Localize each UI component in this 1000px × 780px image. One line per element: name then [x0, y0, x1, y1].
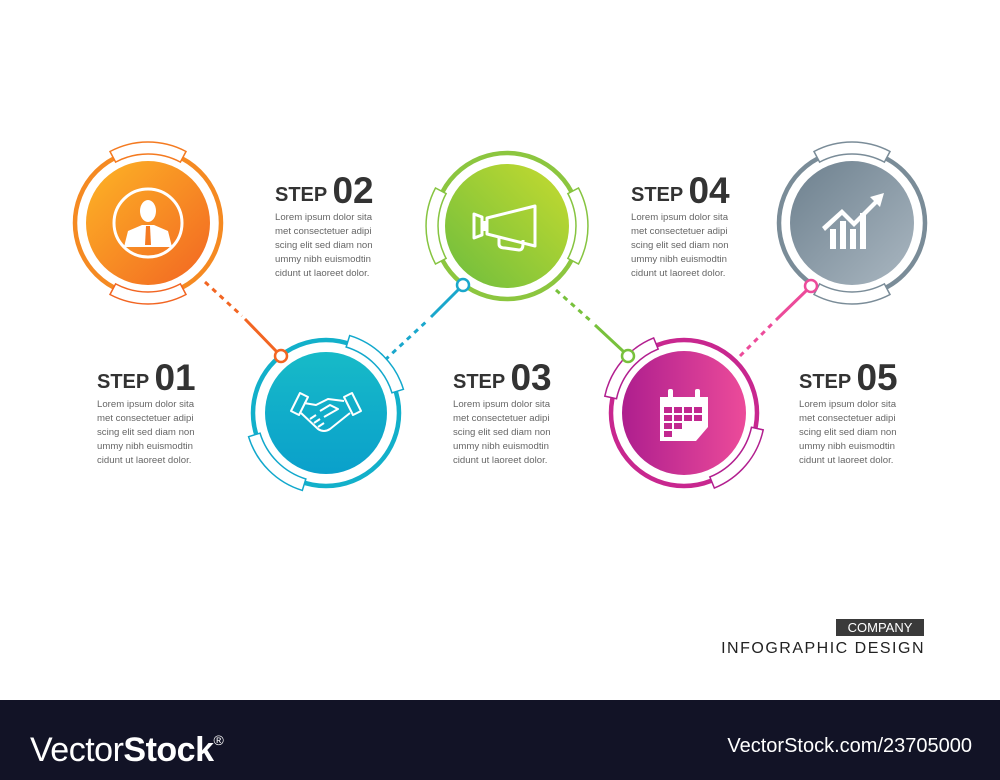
connector 4-5	[740, 290, 807, 356]
step 04 text: ummy nibh euismodtin	[631, 254, 727, 265]
step 05 text: ummy nibh euismodtin	[799, 441, 895, 452]
node markers	[275, 279, 817, 362]
step 03 text: ummy nibh euismodtin	[453, 441, 549, 452]
step 05 text: scing elit sed diam non	[799, 427, 897, 438]
step 02 text: met consectetuer adipi	[275, 226, 372, 237]
step 01 text: scing elit sed diam non	[97, 427, 195, 438]
icon: calendar	[660, 389, 708, 441]
step 02 text	[275, 170, 374, 279]
step 03 text: STEP 03	[453, 357, 552, 398]
step 03 text: met consectetuer adipi	[453, 413, 550, 424]
step 02 text: Lorem ipsum dolor sita	[275, 212, 372, 223]
infographic design title: INFOGRAPHIC DESIGN	[721, 640, 925, 657]
step 05 text: met consectetuer adipi	[799, 413, 896, 424]
step 01 text: STEP 01	[97, 357, 196, 398]
icon: growth chart	[822, 193, 884, 249]
circle 4: magenta	[598, 332, 770, 494]
circle 1: orange	[75, 142, 221, 304]
step 02 text: scing elit sed diam non	[275, 240, 373, 251]
footer logo: VectorStock®	[30, 731, 223, 769]
company label: COMPANY	[848, 620, 912, 635]
step 02 text: cidunt ut laoreet dolor.	[275, 268, 369, 279]
step 03 text: scing elit sed diam non	[453, 427, 551, 438]
step 05 text: STEP 05	[799, 357, 898, 398]
step 04 text	[631, 170, 730, 279]
step 01 text	[97, 357, 196, 466]
icon: handshake	[291, 393, 361, 431]
step 03 text: Lorem ipsum dolor sita	[453, 399, 550, 410]
connector 2-3	[385, 289, 459, 360]
step 01 text: Lorem ipsum dolor sita	[97, 399, 194, 410]
connector 3-4	[556, 290, 624, 352]
step 04 text: scing elit sed diam non	[631, 240, 729, 251]
circle 3: green	[426, 153, 588, 299]
step 04 text: met consectetuer adipi	[631, 226, 728, 237]
step 03 text	[453, 357, 552, 466]
step 01 text: cidunt ut laoreet dolor.	[97, 455, 191, 466]
footer url: VectorStock.com/23705000	[727, 735, 972, 757]
footer bar	[0, 700, 1000, 780]
step 05 text: cidunt ut laoreet dolor.	[799, 455, 893, 466]
step 05 text: Lorem ipsum dolor sita	[799, 399, 896, 410]
circle 2: blue	[242, 329, 410, 497]
step 05 text	[799, 357, 898, 466]
step 04 text: Lorem ipsum dolor sita	[631, 212, 728, 223]
icon: megaphone	[474, 206, 535, 250]
step 03 text: cidunt ut laoreet dolor.	[453, 455, 547, 466]
step 01 text: ummy nibh euismodtin	[97, 441, 193, 452]
step 04 text: STEP 04	[631, 170, 730, 211]
step 01 text: met consectetuer adipi	[97, 413, 194, 424]
step 04 text: cidunt ut laoreet dolor.	[631, 268, 725, 279]
company label	[836, 619, 924, 636]
connector 1-2	[205, 282, 277, 352]
icon: businessman	[114, 189, 182, 257]
circle 5: gray	[779, 142, 925, 304]
step 02 text: STEP 02	[275, 170, 374, 211]
step 02 text: ummy nibh euismodtin	[275, 254, 371, 265]
